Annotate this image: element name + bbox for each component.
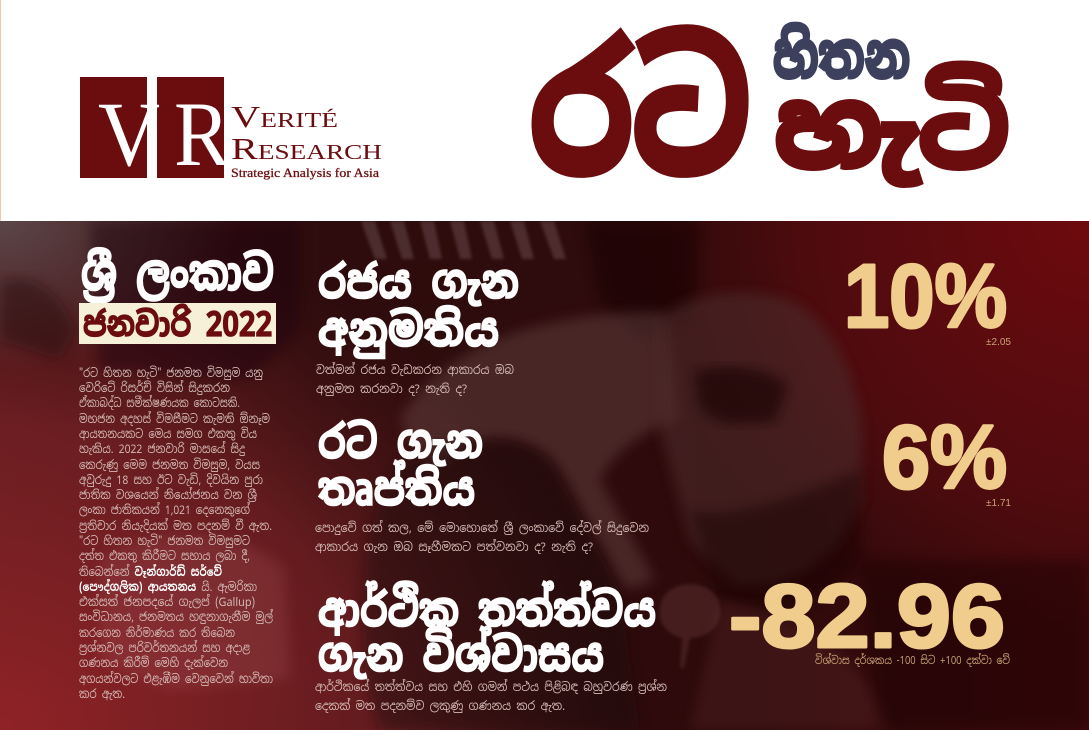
text block: about the survey: මහජන අදහස් විමසීමට කැමති ඕනෑම xyxy=(79,411,270,427)
heading: country satisfaction xyxy=(318,412,483,519)
text block: about the survey: ජාතික වශයෙන් නියෝජනය වන ශ්‍රී xyxy=(79,487,257,503)
question text: government approval xyxy=(316,362,514,397)
text block: about the survey: කරගෙන නිර්මාණය කර තිබෙන xyxy=(79,625,235,641)
section: satisfaction with the country xyxy=(315,412,649,555)
stat: 10%: ±2.05 xyxy=(986,337,1011,348)
section: economic confidence xyxy=(315,580,667,714)
portrait eye shadow xyxy=(694,367,788,424)
question text: country satisfaction xyxy=(315,520,649,555)
stat: 6%: 6% xyxy=(882,408,1007,508)
light shoulder band xyxy=(400,312,680,590)
stat: -82.96: -82.96 xyxy=(729,567,1005,667)
stat: 6%: ±1.71 xyxy=(986,498,1011,509)
logo: Verité Research: V xyxy=(98,83,160,185)
page background: white header xyxy=(0,0,1089,221)
stat: 10%: 10% xyxy=(844,247,1007,347)
heading: government approval xyxy=(318,252,519,360)
masthead: රට හිතන හැටි xyxy=(530,0,1009,223)
question text: country satisfaction: ආකාරය ගැන ඔබ සෑහීමකට පත්වනවා ද? නැති ද? xyxy=(315,539,593,555)
heading: country satisfaction: රට ගැන xyxy=(318,412,483,472)
portrait beard xyxy=(690,470,860,608)
text block: about the survey: අගයන්වලට එළැඹීම වෙනුවෙන් භාවිතා xyxy=(79,671,273,687)
heading: government approval: රජය ගැන xyxy=(318,252,519,312)
heading: economic confidence: ආර්ථික තත්ත්වය xyxy=(318,580,656,640)
logo: Verité Research: V ERITÉ xyxy=(231,99,338,134)
dark under-shoulder xyxy=(362,439,640,730)
date banner: January 2022: ජනවාරි 2022 xyxy=(83,302,272,346)
text block: about the survey: "රට හිතන හැටි" ජනමත විමසුමට xyxy=(79,533,250,549)
logo: Verité Research xyxy=(80,77,382,185)
question text: government approval: වත්මන් රජය වැඩකරන ආකාරය ඔබ xyxy=(316,362,514,378)
masthead: රට හිතන හැටි: හිතන xyxy=(773,16,910,97)
text block: about the survey: එක්සත් ජනපදයේ ගැලප් (Gallup) xyxy=(79,594,255,610)
question text: government approval: අනුමත කරනවා ද? නැති ද? xyxy=(316,381,467,397)
text block: about the survey xyxy=(79,365,274,702)
text block: about the survey: ගණනය කිරීම් මෙහි දැක්වෙන xyxy=(79,655,228,671)
question text: economic confidence: දෙකක් මත පදනම්ව ලකුණු ගණනය කර ඇත. xyxy=(315,698,565,714)
zebra stripes xyxy=(361,221,566,259)
masthead: රට හිතන හැටි: හැටි xyxy=(775,61,1009,199)
text block: about the survey: කෙරුණු මෙම ජනමත විමසුම, වයස xyxy=(79,457,260,473)
left edge line xyxy=(0,0,1,221)
question text: economic confidence xyxy=(315,679,667,714)
question text: country satisfaction: පොදුවේ ගත් කල, මේ මොහොතේ ශ්‍රී ලංකාවේ දේවල් සිදුවෙන xyxy=(315,520,649,536)
photo collage background panel xyxy=(0,221,1089,730)
heading: Sri Lanka: ශ්‍රී ලංකාව xyxy=(81,242,274,305)
text block: about the survey: ආයතනයකට මෙය සමග එකතු විය xyxy=(79,426,257,442)
text block: about the survey: ප්‍රතිචාර නියැදියක් මත පදනම් වී ඇත. xyxy=(79,518,272,534)
logo: Verité Research: R xyxy=(174,83,231,185)
stat: -82.96: විශ්වාස දර්ශකය -100 සිට +100 දක්වා වේ xyxy=(815,653,1010,668)
logo: Verité Research: R ESEARCH xyxy=(231,131,382,166)
heading: economic confidence xyxy=(318,580,656,685)
heading: country satisfaction: තෘප්තිය xyxy=(318,459,475,519)
section: government approval xyxy=(316,252,519,397)
question text: economic confidence: ආර්ථිකයේ තත්ත්වය සහ එහි ගමන් පථය පිළිබඳ බහුවරණ ප්‍රශ්න xyxy=(315,679,667,695)
text block: about the survey: හැකිය. 2022 ජනවාරි මාසයේ සිදු xyxy=(79,441,245,457)
text block: about the survey: වෙරිටේ රිසර්ච් විසින් සිදුකරන xyxy=(79,380,230,396)
text block: about the survey: තිබෙන්නේ වෑන්ගාර්ඩ් සර්වේ xyxy=(79,563,222,580)
text block: about the survey: ලංකා ජාතිකයන් 1,021 දෙනෙකුගේ xyxy=(79,502,250,518)
logo: Verité Research: Strategic Analysis for Asia xyxy=(231,165,379,180)
portrait face xyxy=(660,293,862,586)
text block: about the survey: දත්ත එකතු කිරීමට සහාය ලබා දී, xyxy=(79,548,250,564)
text block: about the survey: ප්‍රශ්නවල පරිවර්තනයන් සහ අදාළ xyxy=(79,640,250,656)
text block: about the survey: අවුරුදු 18 සහ ඊට වැඩි, දිවයින පුරා xyxy=(79,472,263,488)
heading: government approval: අනුමතිය xyxy=(318,300,499,360)
text block: about the survey: කර ඇත. xyxy=(79,686,125,702)
text block: about the survey: "රට හිතන හැටි" ජනමත විමසුම යනු xyxy=(79,365,263,381)
text block: about the survey: ඒකාබද්ධ සමීක්ෂණයක කොටසකි. xyxy=(79,395,240,411)
text block: about the survey: සංවිධානය, ජනමතය හඳුනාගැනීම මුල් xyxy=(79,609,274,625)
heading: economic confidence: ගැන විශ්වාසය xyxy=(318,625,604,685)
masthead: රට හිතන හැටි: රට xyxy=(530,0,750,223)
text block: about the survey: (පෞද්ගලික) ආයතනය යි. ඇමරිකා xyxy=(79,579,257,595)
